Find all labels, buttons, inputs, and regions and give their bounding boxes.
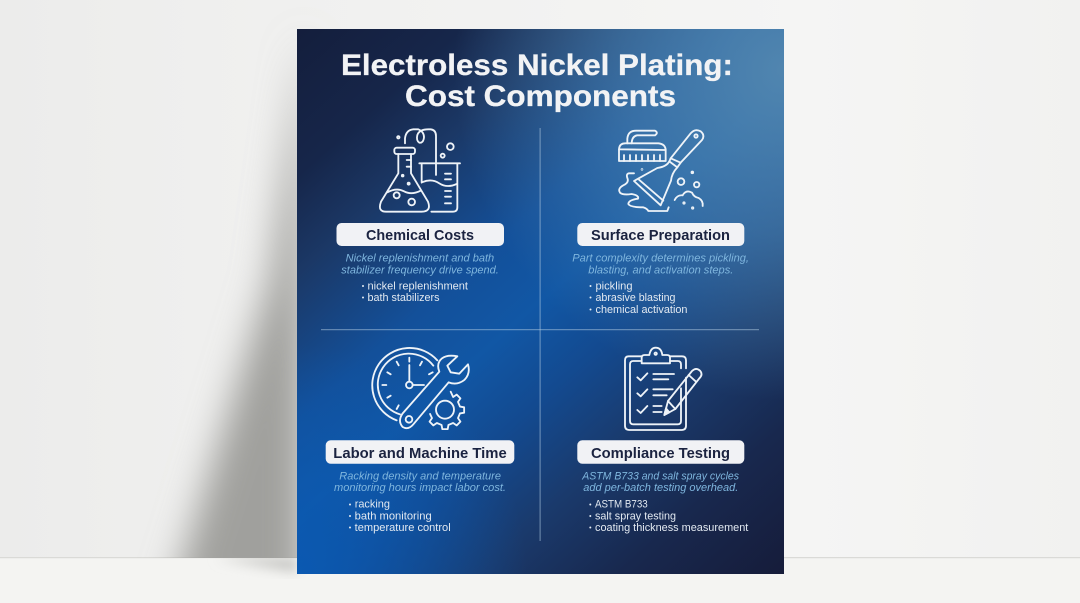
label: labor and machine time [326,440,514,464]
description: chemical costs [341,252,499,276]
label: labor and machine time: Labor and Machine Time [333,445,507,462]
description: labor and machine time: monitoring hours impact labor cost. [334,482,506,494]
poster shadow on wall [160,65,297,558]
description: compliance testing [581,470,739,494]
bullets: labor and machine time: bath monitoring [355,510,432,522]
icon: clipboard and pencil [625,348,702,430]
description: chemical costs: Nickel replenishment and bath [346,252,494,264]
bullets: compliance testing: salt spray testing [595,510,676,522]
bullets: labor and machine time: racking [355,499,390,511]
bullets: labor and machine time: temperature control [355,522,451,534]
poster gradient background [297,29,784,574]
bullets: compliance testing [589,499,748,534]
label: surface preparation: Surface Preparation [591,227,730,244]
icon: brush and scraper [619,130,703,211]
label: chemical costs: Chemical Costs [366,227,474,244]
description: surface preparation [572,252,749,276]
bullets: compliance testing: ASTM B733 [595,499,648,511]
icon: clock, wrench and gear [372,348,469,429]
bullets: surface preparation: pickling [596,280,632,292]
poster [297,29,784,574]
description: surface preparation: Part complexity determines pickling, [572,252,749,264]
title: Electroless Nickel Plating: [341,49,733,82]
poster shadow on floor [215,558,297,572]
label: compliance testing: Compliance Testing [591,445,730,462]
bullets: chemical costs [362,280,468,304]
floor [0,558,1080,603]
description: compliance testing: ASTM B733 and salt spray cycles [581,470,739,482]
description: surface preparation: blasting, and activation steps. [588,264,733,276]
description: labor and machine time: Racking density and temperature [339,470,501,482]
label: surface preparation [577,223,744,246]
label: compliance testing [577,440,744,464]
bullets: chemical costs: bath stabilizers [368,292,440,304]
panel: surface preparation [572,130,749,316]
bullets: labor and machine time [349,499,451,534]
bullets: compliance testing: coating thickness measurement [595,522,748,534]
label: chemical costs [336,223,504,246]
bullets: surface preparation [590,280,688,316]
bullets: surface preparation: abrasive blasting [596,292,676,304]
title: Cost Components [405,80,676,113]
panel: compliance testing [577,348,748,534]
panel: labor and machine time [326,348,514,534]
description: labor and machine time [334,470,506,494]
bullets: surface preparation: chemical activation [596,304,688,316]
panel: chemical costs [336,129,504,304]
description: compliance testing: add per-batch testing overhead. [583,482,738,494]
title [341,49,733,113]
description: chemical costs: stabilizer frequency drive spend. [341,264,499,276]
bullets: chemical costs: nickel replenishment [368,280,468,292]
icon: flask and beaker [380,129,460,212]
